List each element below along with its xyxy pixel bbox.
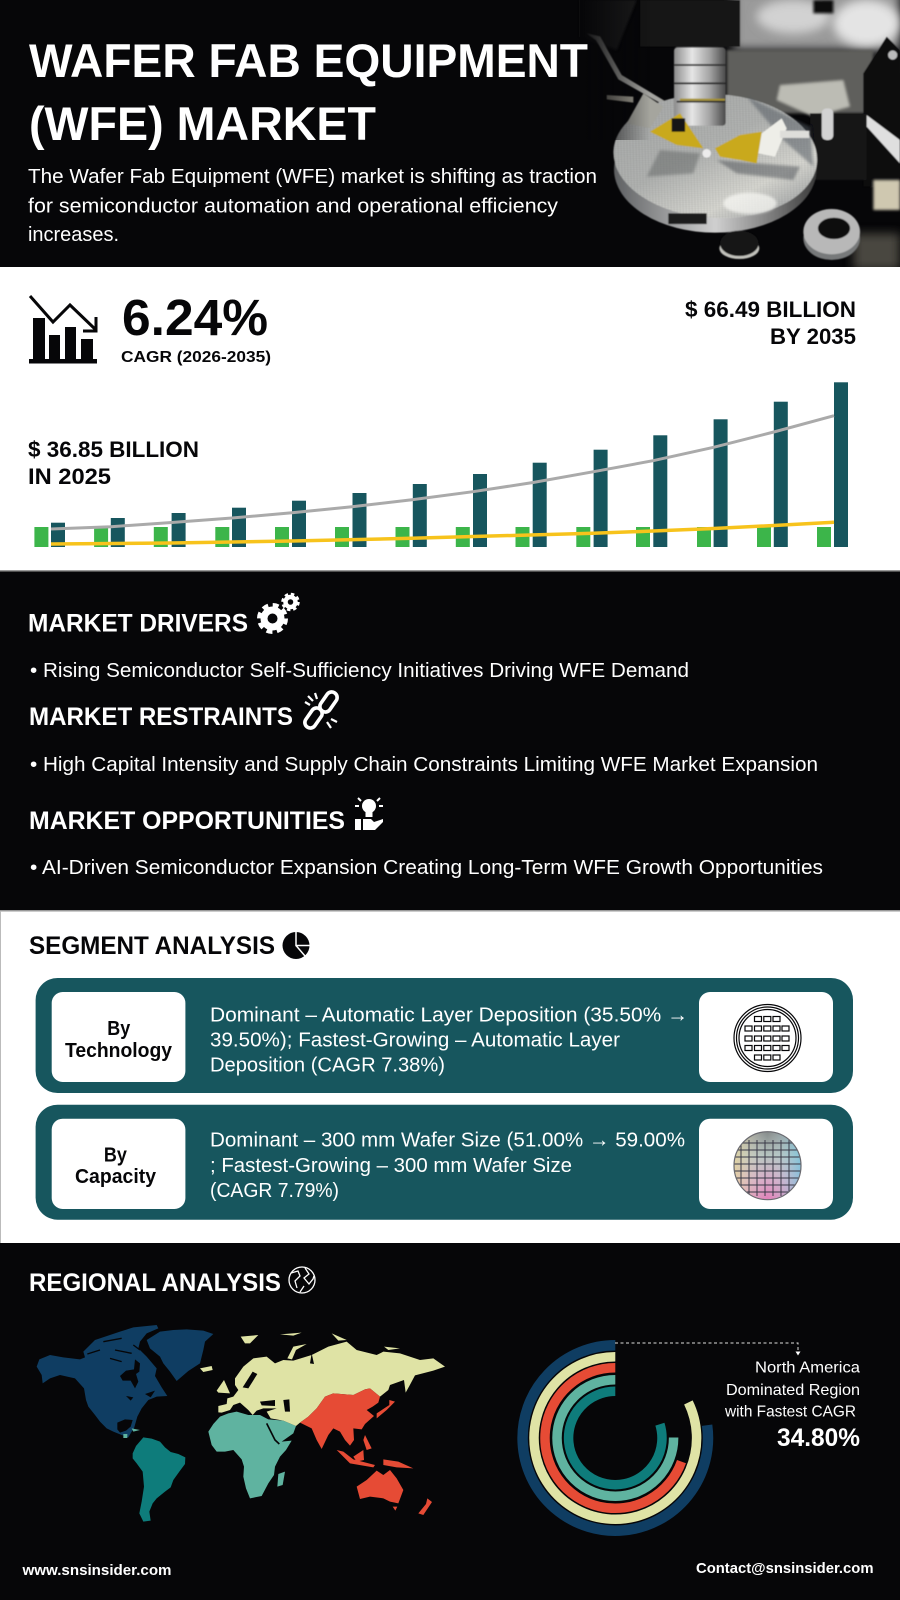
intro text — [28, 165, 597, 246]
CAGR value: CAGR (2026-2035) — [121, 349, 271, 366]
intro text: The Wafer Fab Equipment (WFE) market is shifting as traction — [28, 165, 597, 188]
description — [210, 1005, 688, 1077]
description: ; Fastest-Growing – 300 mm Wafer Size — [210, 1155, 572, 1177]
icon: idea in hand — [355, 798, 383, 830]
donut chart — [523, 1345, 708, 1531]
card: by capacity — [36, 1105, 853, 1220]
panel: market dynamics — [0, 570, 900, 911]
world map — [37, 1325, 445, 1522]
icon: globe — [289, 1267, 315, 1293]
cut-out: Red Sea — [267, 1423, 279, 1444]
label — [65, 1018, 173, 1062]
intro text: increases. — [28, 223, 119, 246]
label: By — [104, 1145, 128, 1167]
title: (WFE) MARKET — [29, 97, 376, 150]
label: Capacity — [75, 1166, 157, 1188]
callout: dominant region: North America — [755, 1360, 860, 1377]
value 2035 — [685, 297, 856, 349]
icon: gears — [259, 594, 298, 632]
icon: pie chart — [282, 932, 310, 959]
description — [210, 1130, 685, 1202]
heading: market restraints — [29, 690, 339, 731]
icon: coloured wafer — [734, 1132, 801, 1200]
description: 39.50%); Fastest-Growing – Automatic Layer — [210, 1030, 620, 1052]
label: Technology — [65, 1040, 173, 1062]
cut-outs: Hudson Bay and Gulf — [87, 1338, 155, 1433]
description: Dominant – Automatic Layer Deposition (35.50% → — [210, 1005, 688, 1027]
panel: header — [0, 0, 900, 270]
cut-outs: inland seas — [243, 1353, 314, 1412]
arrow: callout leader — [615, 1343, 800, 1356]
heading: segment analysis: SEGMENT ANALYSIS — [29, 932, 275, 960]
description: Dominant – 300 mm Wafer Size (51.00% → 59.00% — [210, 1130, 685, 1152]
value 2035: BY 2035 — [770, 324, 856, 349]
bar chart — [34, 382, 848, 547]
callout: dominant region: 34.80% — [777, 1424, 860, 1452]
description: (CAGR 7.79%) — [210, 1180, 339, 1202]
panel: market size — [0, 267, 900, 571]
panel: segment analysis — [0, 910, 900, 1243]
heading: market opportunities — [29, 798, 383, 835]
icon: growth chart — [29, 296, 97, 364]
region: Europe and Russia — [200, 1333, 445, 1426]
CAGR value: 6.24% — [122, 289, 268, 346]
title — [29, 34, 588, 150]
value 2025: IN 2025 — [28, 464, 111, 489]
callout: dominant region: Dominated Region — [726, 1382, 860, 1399]
description: Deposition (CAGR 7.38%) — [210, 1055, 445, 1077]
heading: market restraints: MARKET RESTRAINTS — [29, 703, 293, 731]
card: by technology — [36, 978, 853, 1093]
region: North America — [37, 1325, 213, 1437]
region: Africa and Middle East — [123, 1412, 296, 1498]
region: Asia-Pacific — [300, 1388, 432, 1515]
heading: market drivers — [28, 594, 298, 638]
intro text: for semiconductor automation and operational efficiency — [28, 194, 559, 218]
label: By — [107, 1018, 131, 1040]
footer: contact: Contact@snsinsider.com — [696, 1560, 874, 1577]
heading: market drivers: MARKET DRIVERS — [28, 610, 248, 638]
region: South America — [133, 1437, 185, 1522]
panel: regional analysis — [0, 1243, 900, 1600]
icon: broken chain — [303, 690, 339, 730]
heading: market opportunities: MARKET OPPORTUNITIES — [29, 807, 345, 835]
callout: dominant region: with Fastest CAGR — [724, 1404, 856, 1421]
footer: website: www.snsinsider.com — [21, 1562, 172, 1579]
bullet: opportunities: • AI-Driven Semiconductor Expansion Creating Long-Term WFE Growth Opportunities — [30, 857, 823, 879]
icon: wafer outline — [734, 1004, 801, 1072]
title: WAFER FAB EQUIPMENT — [29, 34, 588, 87]
value 2025 — [28, 437, 199, 489]
callout: dominant region — [724, 1360, 860, 1452]
photo: wafer probe station — [580, 0, 900, 270]
bullet: restraints: • High Capital Intensity and Supply Chain Constraints Limiting WFE Market Expansion — [30, 754, 818, 776]
heading: regional analysis: REGIONAL ANALYSIS — [29, 1269, 281, 1297]
value 2035: $ 66.49 BILLION — [685, 297, 856, 322]
value 2025: $ 36.85 BILLION — [28, 437, 199, 462]
label — [75, 1145, 157, 1188]
bullet: drivers: • Rising Semiconductor Self-Sufficiency Initiatives Driving WFE Demand — [30, 660, 689, 682]
